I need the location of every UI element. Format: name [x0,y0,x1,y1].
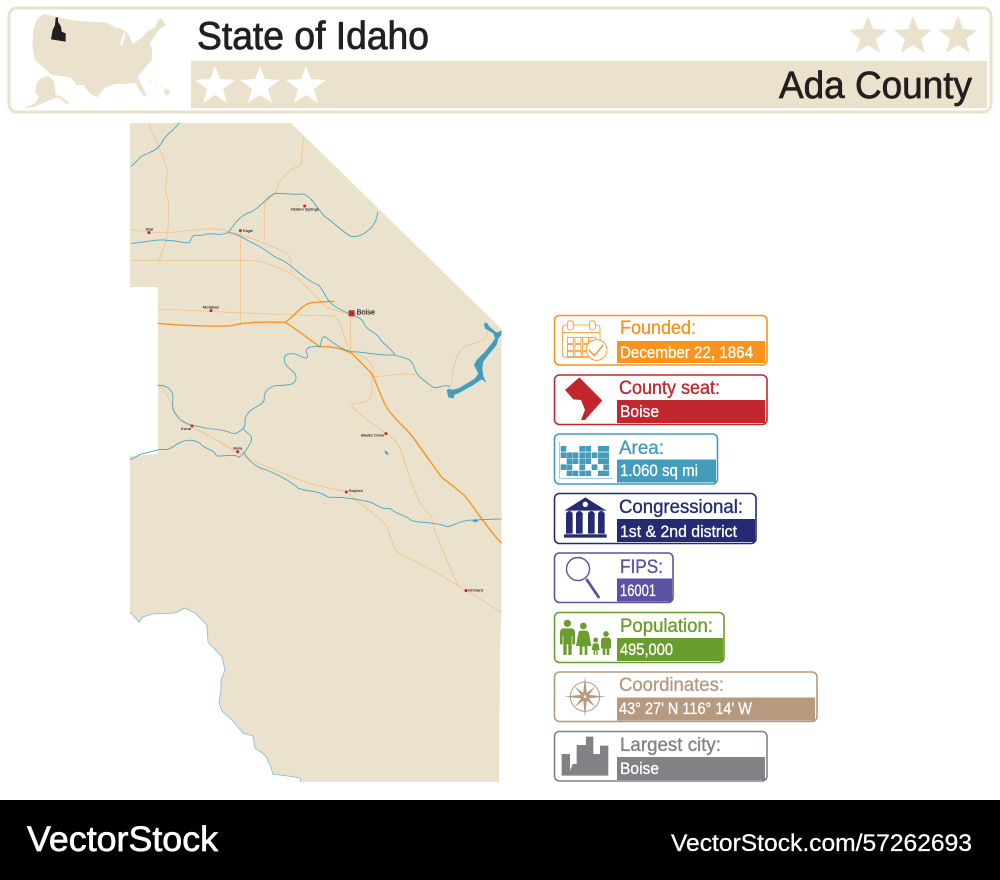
city: Boise: Boise [357,310,375,317]
card: Area: Area: [619,438,664,459]
city: Meridian: Meridian [203,305,219,310]
card: Congressional: Congressional: [619,497,743,518]
city: Eagle: Eagle [243,228,254,233]
card: Congressional [554,494,756,544]
top right stars [849,16,977,53]
icon: magnifying glass [566,558,598,597]
city: Star [146,227,154,234]
card: FIPS: FIPS: [620,557,663,578]
icon: area grid [559,442,613,478]
card: FIPS: 16001 [620,581,656,600]
card: Founded [554,316,767,365]
city: Kuna: Kuna [181,426,192,431]
card: Population [554,612,724,662]
card: Population: Population: [620,616,713,637]
card: Area [554,434,718,484]
city: Mora [233,446,243,453]
card: Congressional: 1st & 2nd district [620,522,737,541]
subtitle band: Ada County [779,65,972,107]
icon: capitol building [564,497,607,538]
roads and rivers, northern part [130,123,488,460]
icon: skyline [562,737,608,776]
city markers and labels [146,204,483,592]
footer brand: VectorStock [27,820,219,859]
card: Largest city [554,732,767,781]
header panel [9,8,991,112]
city: Swan Falls [345,488,364,493]
icon: family [560,620,611,655]
card: Founded: Founded: [620,318,696,339]
locator map: USA with Idaho highlighted [23,14,171,108]
card: FIPS [554,553,673,602]
card: Area: 1.060 sq mi [620,461,698,480]
card: Coordinates: 43° 27' N 116° 14' W [619,699,752,718]
card: Largest city: Largest city: [620,735,721,756]
card: County seat [554,375,767,424]
card: County seat: County seat: [619,378,720,399]
city: Boise [349,310,375,317]
coast line [130,608,301,782]
roads and rivers, southern part [217,440,502,612]
city: Blacks Creek: Blacks Creek [361,432,384,437]
footer image reference: VectorStock.com/57262693 [671,830,972,857]
city: Meridian [203,305,219,312]
card: Coordinates: Coordinates: [619,675,724,696]
subtitle band [191,61,987,108]
city: Kuna [181,424,193,431]
card: Population: 495,000 [620,640,673,659]
card: Largest city: Boise [620,759,659,778]
city: Hidden Springs: Hidden Springs [291,207,319,212]
city: Eagle [239,228,254,233]
city: Star: Star [146,227,154,232]
title: State of Idaho [197,15,429,58]
city: Hidden Springs [291,204,319,212]
card: Coordinates [554,672,817,722]
card: Founded: December 22, 1864 [620,343,753,362]
icon: compass rose [564,676,606,717]
county map [130,123,502,782]
city: Orchard: Orchard [468,587,483,592]
icon: calendar [562,321,607,360]
city: Swan Falls: Swyhee [349,488,364,493]
reservoir [447,323,502,398]
footer bar [0,800,1000,880]
card: County seat: Boise [620,402,659,421]
icon: county shape [565,377,602,420]
city: Mora: Mora [233,446,243,451]
